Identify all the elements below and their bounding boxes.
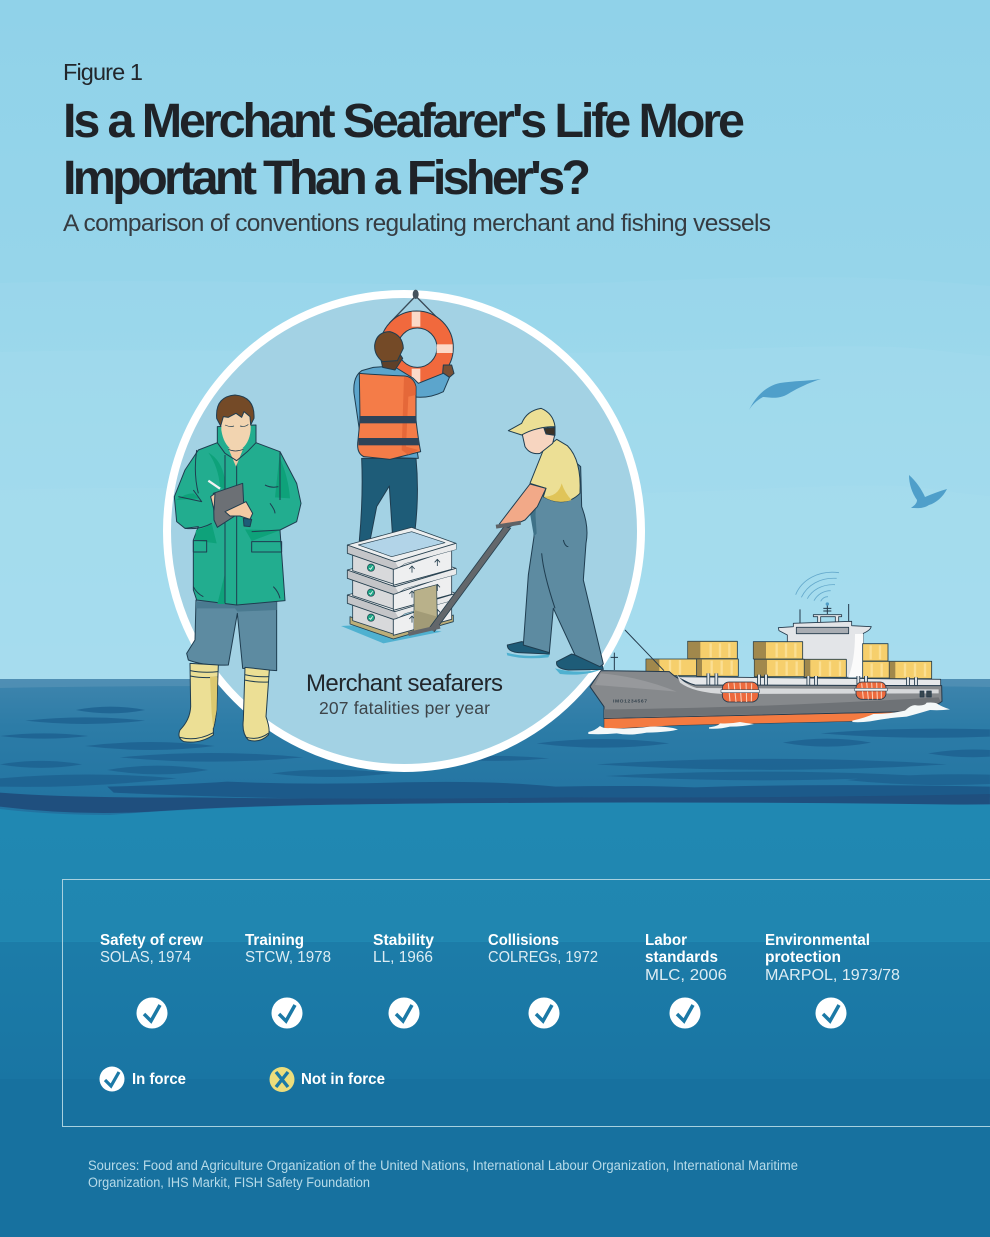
mast and rigging bbox=[611, 630, 664, 671]
table frame bbox=[62, 880, 990, 1126]
column: labor standards: MLC, 2006 bbox=[645, 967, 727, 984]
bridge superstructure bbox=[778, 602, 871, 677]
pallet jack handle bbox=[432, 526, 508, 630]
face bbox=[221, 410, 251, 450]
panel: conventions table bbox=[62, 880, 990, 1126]
column: safety of crew bbox=[100, 932, 204, 966]
legend: in force bbox=[100, 1066, 186, 1092]
title block bbox=[63, 59, 771, 237]
legend: in force: In force bbox=[132, 1071, 186, 1088]
neck bbox=[228, 448, 243, 467]
left boot bbox=[179, 663, 218, 742]
panel label: merchant seafarers: Merchant seafarers bbox=[306, 670, 503, 697]
right boot bbox=[243, 667, 269, 741]
column: collisions: Collisions bbox=[488, 932, 559, 949]
icon: small seabird bbox=[909, 475, 947, 508]
lifeboat: forward bbox=[721, 682, 759, 702]
lower sea panel bbox=[0, 802, 990, 1237]
hands bbox=[211, 493, 253, 519]
illustration: crew member hanging life ring bbox=[354, 290, 454, 541]
trousers bbox=[187, 600, 277, 671]
hair bbox=[217, 395, 254, 426]
illustration: deck worker pulling pallet bbox=[496, 408, 603, 675]
illustration: stacked crates on pallet bbox=[341, 526, 508, 643]
handle grip bbox=[496, 523, 521, 527]
sources note bbox=[88, 1158, 798, 1190]
shirt and arm bbox=[354, 366, 450, 458]
orange boot stripe bbox=[604, 712, 905, 729]
hull bbox=[590, 671, 942, 719]
column: safety of crew: Safety of crew bbox=[100, 932, 204, 949]
hand on ring bbox=[443, 365, 454, 377]
signal waves bbox=[796, 572, 839, 601]
column: collisions: COLREGs, 1972 bbox=[488, 949, 598, 966]
figure label: Figure 1 bbox=[63, 59, 143, 85]
trousers bbox=[359, 458, 417, 541]
column: labor standards: standards bbox=[645, 949, 718, 966]
neck bbox=[381, 352, 403, 370]
panel: merchant seafarers circle bbox=[167, 294, 641, 768]
column labels bbox=[100, 932, 900, 984]
shadows bbox=[507, 653, 603, 675]
column: labor standards bbox=[645, 932, 727, 984]
hull registration: IMO1234567 bbox=[613, 698, 647, 704]
t-shirt bbox=[530, 439, 580, 502]
legend: not in force bbox=[270, 1067, 385, 1092]
cargo containers bbox=[646, 641, 932, 679]
column: environmental protection: MARPOL, 1973/78 bbox=[765, 967, 900, 984]
boots bbox=[507, 642, 549, 654]
column: environmental protection: protection bbox=[765, 949, 841, 966]
life vest bbox=[358, 373, 421, 459]
column: training bbox=[245, 932, 331, 966]
illustration: fisher inspector bbox=[174, 395, 301, 742]
column: stability bbox=[373, 932, 434, 966]
panel label: merchant seafarers: 207 fatalities per year bbox=[319, 698, 490, 718]
coat shading bbox=[176, 453, 290, 604]
check icons row bbox=[136, 998, 846, 1028]
sources note: Sources: Food and Agriculture Organization of the United Nations, International Labour Organization, International Maritime bbox=[88, 1158, 798, 1173]
sky background bbox=[0, 0, 990, 682]
column: collisions bbox=[488, 932, 598, 966]
column: stability: LL, 1966 bbox=[373, 949, 433, 966]
column: training: STCW, 1978 bbox=[245, 949, 331, 966]
panel label: merchant seafarers bbox=[306, 670, 503, 718]
column: environmental protection: Environmental bbox=[765, 932, 870, 949]
container ship bbox=[588, 572, 950, 735]
deck bollards bbox=[708, 673, 916, 685]
column: environmental protection bbox=[765, 932, 900, 984]
legend: not in force: Not in force bbox=[301, 1071, 385, 1088]
main heading: Important Than a Fisher's? bbox=[63, 151, 591, 205]
main heading bbox=[63, 94, 745, 205]
head bbox=[522, 427, 555, 454]
cap bbox=[508, 408, 555, 435]
life ring bbox=[380, 290, 453, 384]
hair bbox=[375, 332, 403, 362]
pen bbox=[208, 481, 220, 489]
sea surface bbox=[0, 679, 990, 815]
sources note: Organization, IHS Markit, FISH Safety Foundation bbox=[88, 1175, 370, 1190]
coat seams bbox=[178, 450, 282, 605]
overalls bbox=[523, 446, 603, 667]
main heading: Is a Merchant Seafarer's Life More bbox=[63, 94, 745, 148]
sling bbox=[414, 585, 437, 634]
column: labor standards: Labor bbox=[645, 932, 687, 949]
deck bbox=[677, 677, 941, 686]
subtitle: A comparison of conventions regulating merchant and fishing vessels bbox=[63, 210, 771, 237]
column: stability: Stability bbox=[373, 932, 434, 949]
portholes bbox=[920, 691, 931, 697]
rain coat bbox=[174, 425, 301, 605]
column: safety of crew: SOLAS, 1974 bbox=[100, 949, 191, 966]
arm bbox=[499, 484, 546, 527]
clipboard bbox=[213, 483, 244, 527]
hood opening bbox=[217, 443, 256, 461]
bow and stern foam bbox=[588, 702, 950, 735]
icon: large seabird bbox=[749, 379, 821, 410]
column: training: Training bbox=[245, 932, 304, 949]
lifeboat: aft bbox=[855, 682, 887, 699]
